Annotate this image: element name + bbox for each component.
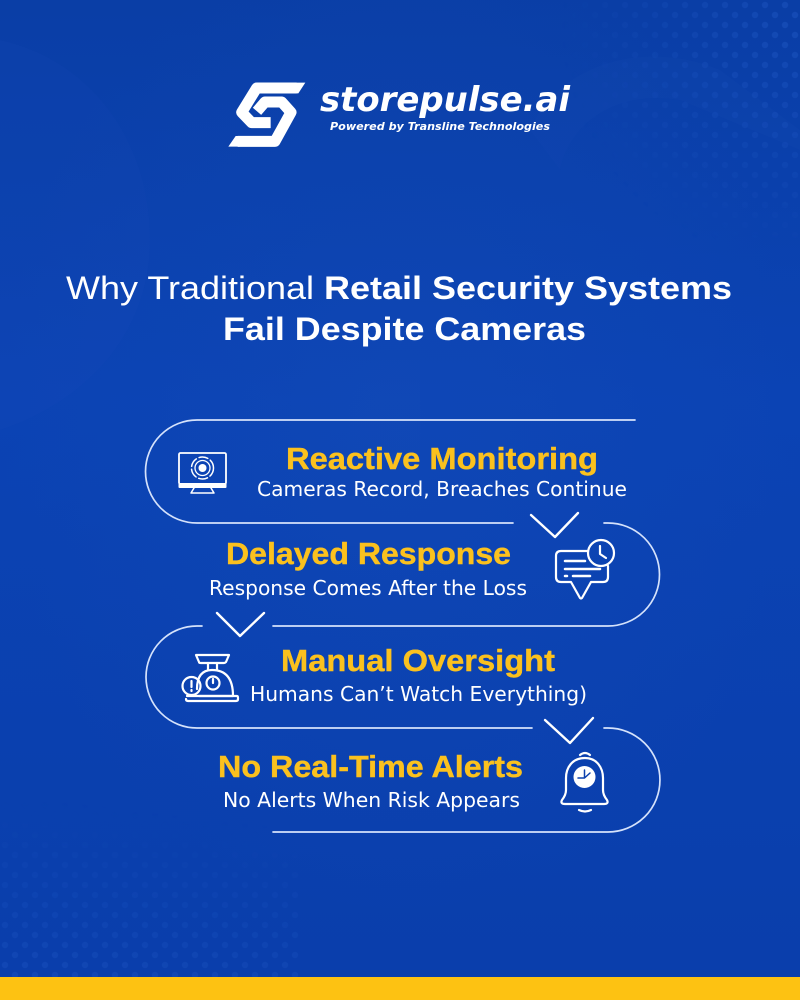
title: Fail Despite Cameras: [223, 311, 586, 347]
icon: monitor: [178, 453, 226, 493]
step 1: reactive monitoring: [146, 420, 635, 523]
subheading: Cameras Record, Breaches Continue: [257, 477, 627, 501]
arrow 1: [531, 513, 578, 537]
tagline: Powered by Transline Technologies: [330, 121, 550, 133]
subheading: No Alerts When Risk Appears: [223, 788, 520, 812]
background: [565, 2, 798, 106]
icon: bell with clock: [561, 753, 608, 812]
title: [66, 270, 732, 347]
subheading: Humans Can’t Watch Everything): [250, 682, 587, 706]
arrow 2: [217, 613, 264, 636]
footer bar: [0, 977, 800, 1000]
outline 3: [146, 626, 532, 728]
heading: No Real-Time Alerts: [218, 749, 523, 784]
outline 1: [146, 420, 635, 523]
icon: scale: [182, 655, 238, 701]
heading: Reactive Monitoring: [286, 441, 598, 476]
arrow 3: [545, 718, 593, 743]
logo: [228, 80, 571, 147]
wordmark: storepulse.ai: [320, 80, 571, 120]
logo mark: [228, 83, 305, 147]
title: Why Traditional Retail Security Systems: [66, 270, 732, 306]
heading: Manual Oversight: [281, 643, 555, 678]
icon: chat with clock: [556, 540, 614, 598]
step 3: manual oversight: [146, 626, 587, 728]
subheading: Response Comes After the Loss: [209, 576, 527, 600]
step 2: delayed response: [209, 523, 660, 626]
heading: Delayed Response: [226, 536, 511, 571]
outline 4: [273, 728, 660, 832]
step 4: no real-time alerts: [218, 728, 660, 832]
outline 2: [273, 523, 660, 626]
